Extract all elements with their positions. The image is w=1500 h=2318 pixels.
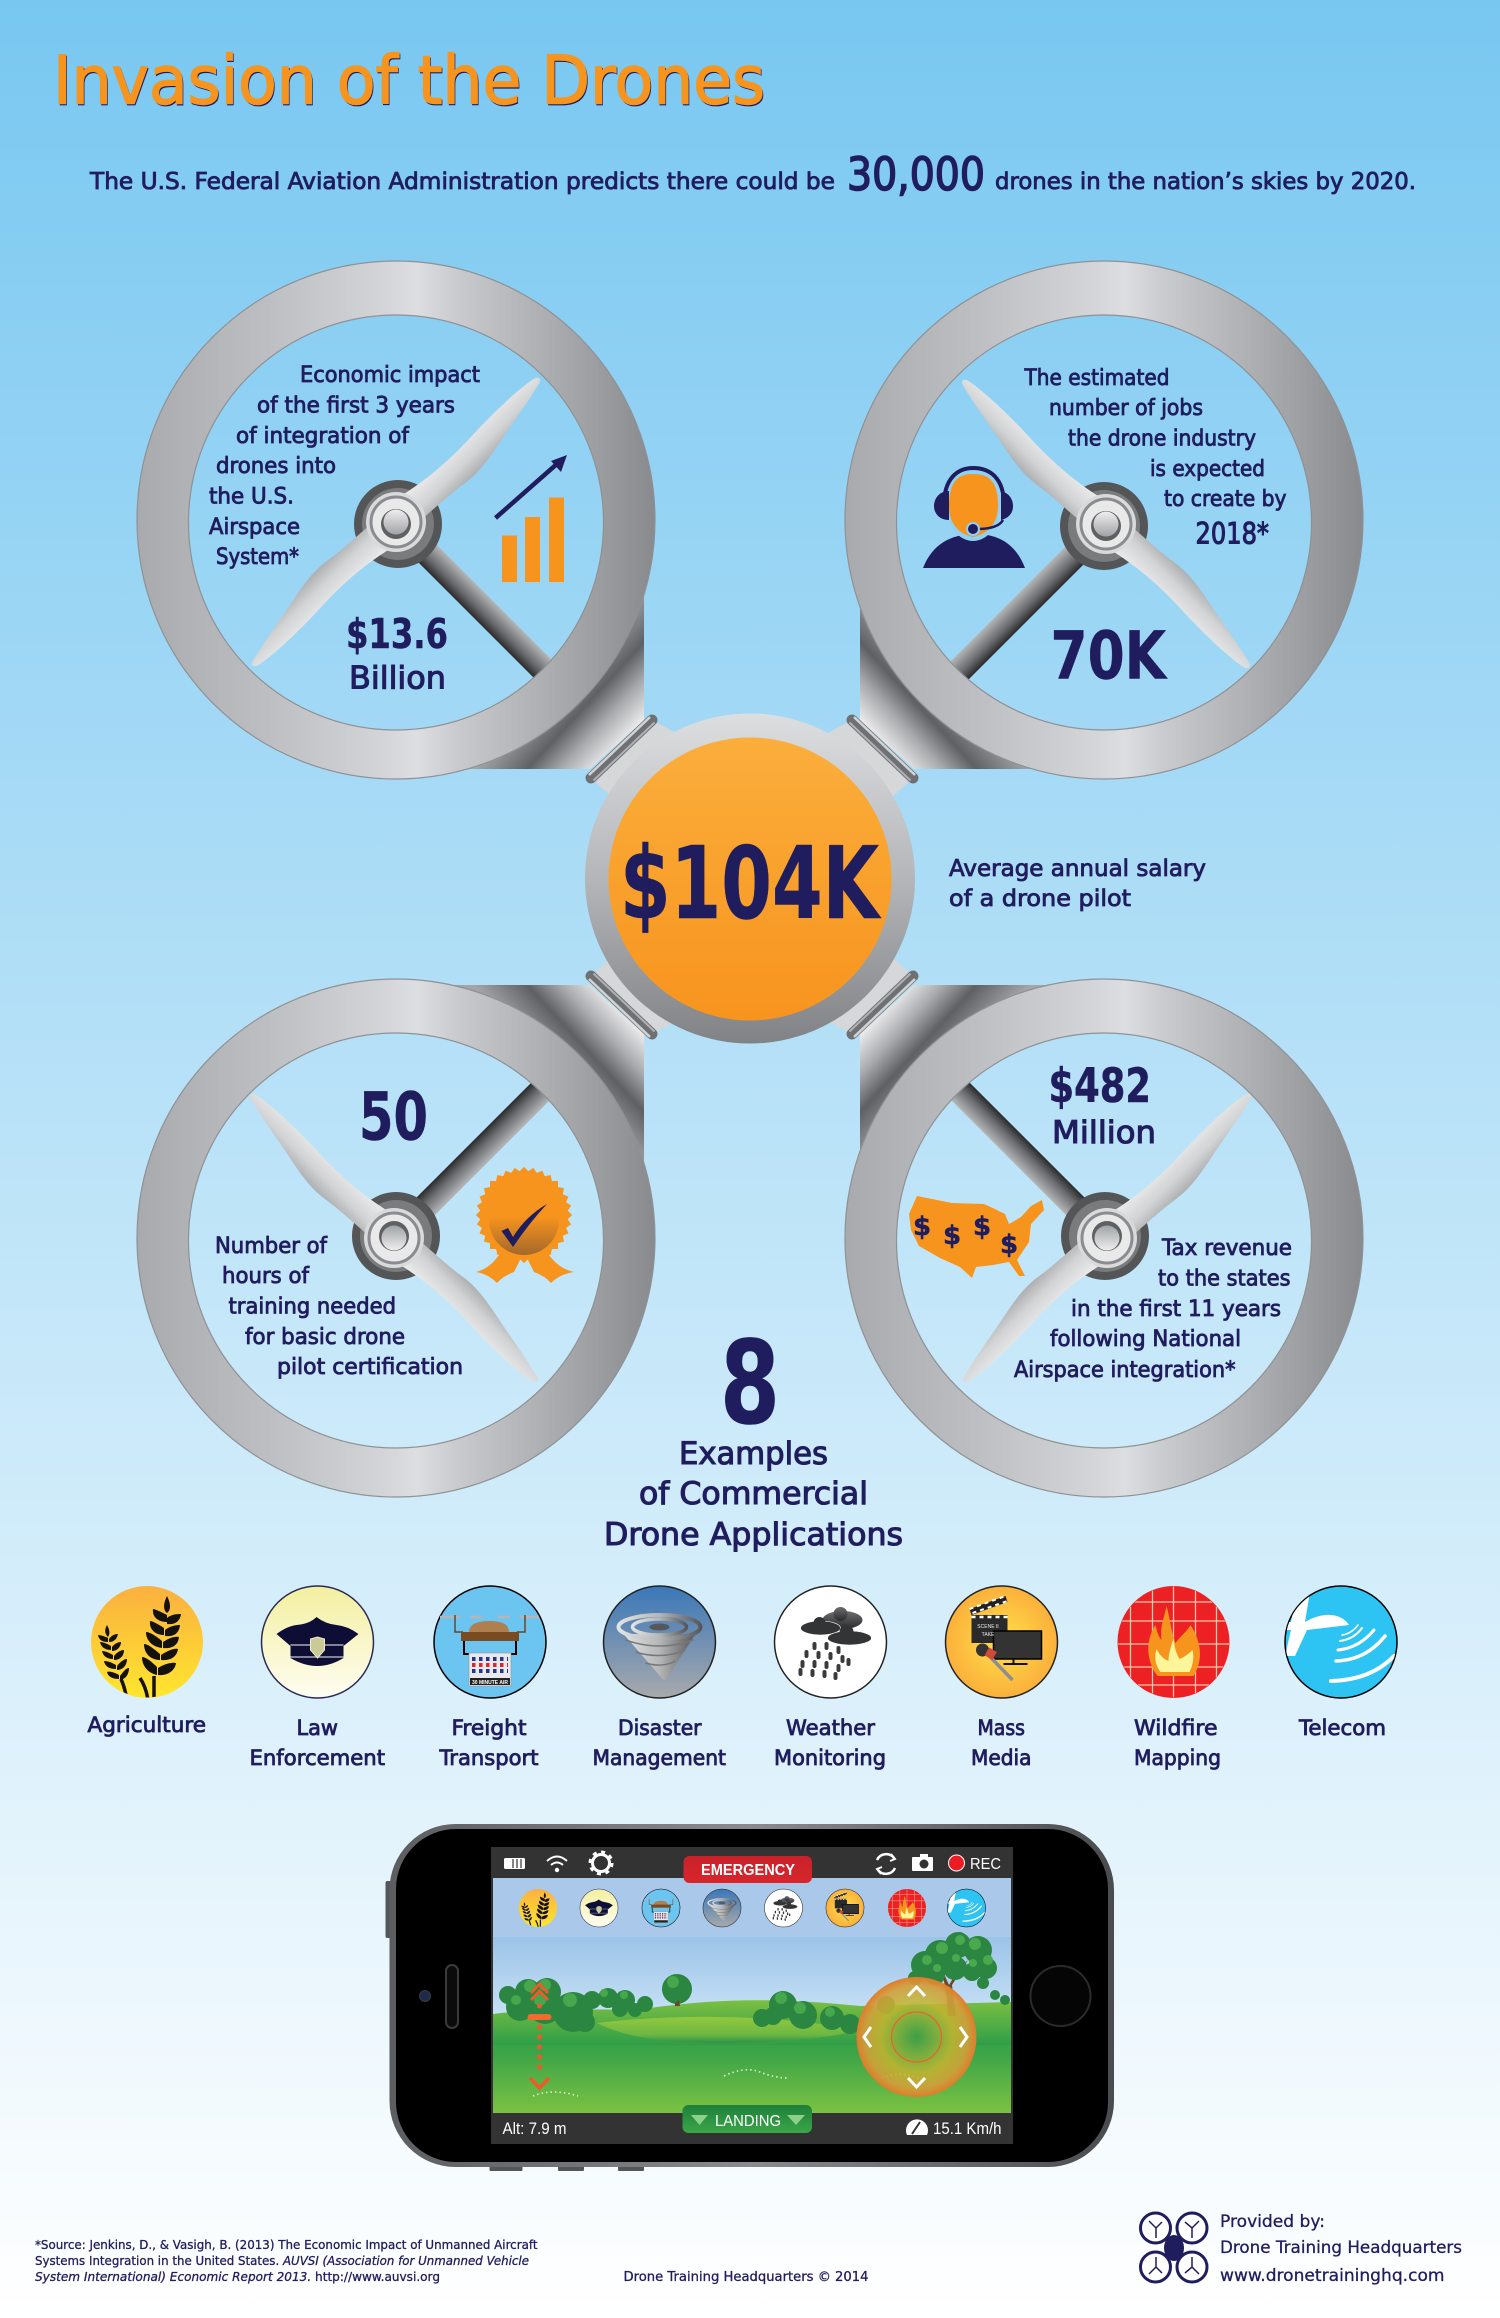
stat: 50 <box>359 1078 428 1156</box>
text block: pilot certification <box>277 1355 463 1380</box>
text block <box>1024 366 1286 550</box>
panel: central hub salary <box>585 714 915 1044</box>
salary caption: of a drone pilot <box>949 886 1131 912</box>
label: Mass <box>978 1716 1025 1741</box>
joystick <box>856 1977 976 2097</box>
icon: media gear: SCENE II <box>977 1624 999 1630</box>
label <box>592 1716 726 1771</box>
text block: to the states <box>1158 1266 1290 1292</box>
ring <box>845 261 1363 779</box>
source citation <box>35 2237 538 2284</box>
text block: Number of <box>215 1234 328 1259</box>
text block: the U.S. <box>209 484 294 510</box>
label: Freight <box>452 1716 526 1741</box>
stat: Billion <box>349 660 446 696</box>
record indicator <box>948 1855 1001 1873</box>
icon: wheat <box>91 1586 203 1700</box>
ring <box>137 979 655 1497</box>
icon: police hat <box>262 1586 374 1698</box>
text block: number of jobs <box>1049 396 1203 421</box>
record indicator: REC <box>970 1856 1001 1873</box>
application: agriculture <box>88 1586 206 1738</box>
provider credit: www.dronetraininghq.com <box>1220 2266 1444 2286</box>
icon: media gear: TAKE <box>982 1632 995 1638</box>
icon: US map with dollars <box>909 1196 1044 1278</box>
icon: wifi <box>547 1856 567 1871</box>
emergency button: EMERGENCY <box>701 1862 795 1879</box>
text block: in the first 11 years <box>1071 1297 1281 1322</box>
emergency button <box>684 1856 812 1883</box>
application: telecom <box>1285 1586 1397 1741</box>
icon: US map with dollars: $ <box>913 1212 931 1242</box>
drone arm: bottom right <box>824 954 1049 1173</box>
text block: hours of <box>222 1264 310 1289</box>
ring <box>845 979 1363 1497</box>
label: Wildfire <box>1134 1716 1218 1741</box>
subtitle with 30,000 prediction: The U.S. Federal Aviation Administration predicts there could be <box>89 169 835 195</box>
title: Invasion of the Drones <box>54 43 766 121</box>
text block: is expected <box>1150 457 1265 482</box>
text block: of the first 3 years <box>257 394 455 418</box>
icon: US map with dollars: $ <box>943 1221 961 1251</box>
text block: Economic impact <box>300 363 480 388</box>
heading: 8 examples: Examples <box>679 1436 828 1472</box>
mini application icons <box>519 1889 986 1928</box>
label: Disaster <box>618 1716 702 1741</box>
speed readout <box>906 2119 1002 2138</box>
source citation: *Source: Jenkins, D., & Vasigh, B. (2013) The Economic Impact of Unmanned Aircraft <box>35 2237 538 2252</box>
label: Mapping <box>1134 1746 1221 1771</box>
hub disc <box>585 714 915 1044</box>
salary caption: Average annual salary <box>949 856 1206 882</box>
label: Telecom <box>1298 1716 1386 1741</box>
drone arm: top left <box>455 581 680 800</box>
stat <box>1048 1059 1156 1151</box>
stat: $482 <box>1048 1059 1151 1114</box>
label <box>971 1716 1032 1771</box>
heading: 8 examples: Drone Applications <box>604 1517 903 1553</box>
text block: following National <box>1050 1327 1241 1352</box>
icon: gear <box>590 1852 612 1874</box>
label: Law <box>296 1716 338 1741</box>
text block: The estimated <box>1024 366 1170 391</box>
application: law enforcement <box>250 1586 385 1771</box>
speed readout: 15.1 Km/h <box>933 2120 1002 2138</box>
grass flecks <box>533 2070 920 2096</box>
text block: drones into <box>216 454 336 479</box>
icon: delivery drone: 30 MINUTE AIR <box>472 1680 508 1686</box>
landing button: LANDING <box>715 2113 781 2130</box>
icon: sync <box>877 1854 895 1874</box>
orange centre <box>608 738 892 1020</box>
icon: delivery drone <box>434 1586 546 1698</box>
stat: $13.6 <box>346 610 448 658</box>
provider credit: Provided by: <box>1220 2212 1325 2232</box>
text block: Airspace <box>209 515 300 540</box>
tree clumps <box>499 1974 1010 2034</box>
source citation: System International) Economic Report 2013. http://www.auvsi.org <box>35 2269 440 2284</box>
heading: 8 examples <box>604 1317 903 1553</box>
label <box>439 1716 538 1771</box>
screen frame <box>491 1847 1013 2144</box>
altitude slider <box>528 1984 552 2088</box>
scene: landscape <box>493 1878 1011 2114</box>
text block <box>1014 1236 1292 1383</box>
home button <box>1030 1966 1090 2026</box>
text block: Tax revenue <box>1161 1236 1292 1261</box>
icon: headset operator <box>923 468 1025 568</box>
text block: System* <box>216 545 299 570</box>
stat: 70K <box>1050 618 1168 694</box>
icon: rising bar chart <box>496 455 567 582</box>
copyright: Drone Training Headquarters © 2014 <box>624 2270 868 2285</box>
status bar icons <box>504 1852 1001 1874</box>
drone arm: bottom left <box>455 954 680 1173</box>
text block <box>215 1234 463 1380</box>
propeller <box>942 1073 1266 1397</box>
camera <box>420 1990 430 2002</box>
icon: certification badge <box>476 1167 574 1283</box>
big tree <box>908 1932 997 2016</box>
text block: for basic drone <box>245 1325 405 1350</box>
subtitle with 30,000 prediction: drones in the nation’s skies by 2020. <box>995 169 1416 195</box>
altitude readout: Alt: 7.9 m <box>502 2120 566 2138</box>
label: Monitoring <box>774 1746 886 1771</box>
text block: Airspace integration* <box>1014 1358 1236 1383</box>
landing button <box>682 2105 812 2133</box>
icon: aircraft signal <box>1285 1586 1397 1698</box>
application: weather monitoring <box>774 1586 886 1771</box>
provider credit: Drone Training Headquarters <box>1220 2238 1462 2258</box>
stat: Million <box>1052 1115 1156 1151</box>
icon: battery <box>504 1858 525 1869</box>
text block: of integration of <box>236 424 410 449</box>
salary caption <box>949 856 1206 912</box>
speaker <box>446 1965 458 2028</box>
propeller <box>235 1073 559 1397</box>
label: Media <box>971 1746 1032 1771</box>
phone body <box>390 1824 1114 2167</box>
text block: 2018* <box>1196 516 1269 550</box>
label: Management <box>592 1746 726 1771</box>
subtitle with 30,000 prediction: 30,000 <box>847 148 985 201</box>
application: freight transport <box>434 1586 546 1771</box>
subtitle with 30,000 prediction <box>89 148 1416 201</box>
label: Agriculture <box>88 1713 206 1738</box>
icon: media gear <box>946 1586 1058 1698</box>
text block <box>209 363 480 570</box>
icon: flame on grid <box>1118 1586 1230 1698</box>
label <box>774 1716 886 1771</box>
text block: the drone industry <box>1068 426 1256 452</box>
label <box>1134 1716 1221 1771</box>
drone arm: top right <box>824 581 1049 800</box>
source citation: Systems Integration in the United States. AUVSI (Association for Unmanned Vehicle <box>35 2253 529 2268</box>
ring <box>137 261 655 779</box>
text block: training needed <box>228 1294 396 1320</box>
panel: jobs <box>845 261 1363 779</box>
application: wildfire mapping <box>1118 1586 1230 1771</box>
stat <box>346 610 448 696</box>
icon: US map with dollars: $ <box>973 1212 991 1242</box>
phone <box>386 1824 1114 2171</box>
text block: to create by <box>1164 487 1286 512</box>
heading: 8 examples: 8 <box>720 1317 780 1451</box>
icon: rain clouds <box>774 1586 886 1698</box>
panel: training hours <box>137 979 655 1497</box>
provider credit <box>1220 2212 1462 2286</box>
label <box>250 1716 385 1771</box>
heading: 8 examples: of Commercial <box>639 1476 868 1512</box>
application: mass media <box>946 1586 1058 1771</box>
phone side and bottom buttons <box>386 1881 644 2171</box>
panel: economic impact <box>137 261 655 779</box>
salary figure: $104K <box>620 825 882 942</box>
landing bar <box>493 2113 1011 2142</box>
application: disaster management <box>592 1586 726 1771</box>
logo: drone <box>1140 2213 1207 2282</box>
propeller <box>941 365 1265 689</box>
icon: camera <box>912 1854 933 1871</box>
icon: tornado <box>604 1586 716 1698</box>
panel: tax revenue <box>845 979 1363 1497</box>
label: Weather <box>786 1716 875 1741</box>
label: Transport <box>439 1746 538 1771</box>
label: Enforcement <box>250 1746 385 1771</box>
icon: US map with dollars: $ <box>1000 1230 1018 1260</box>
title: Invasion of the Drones <box>53 42 765 120</box>
propeller <box>237 363 561 687</box>
